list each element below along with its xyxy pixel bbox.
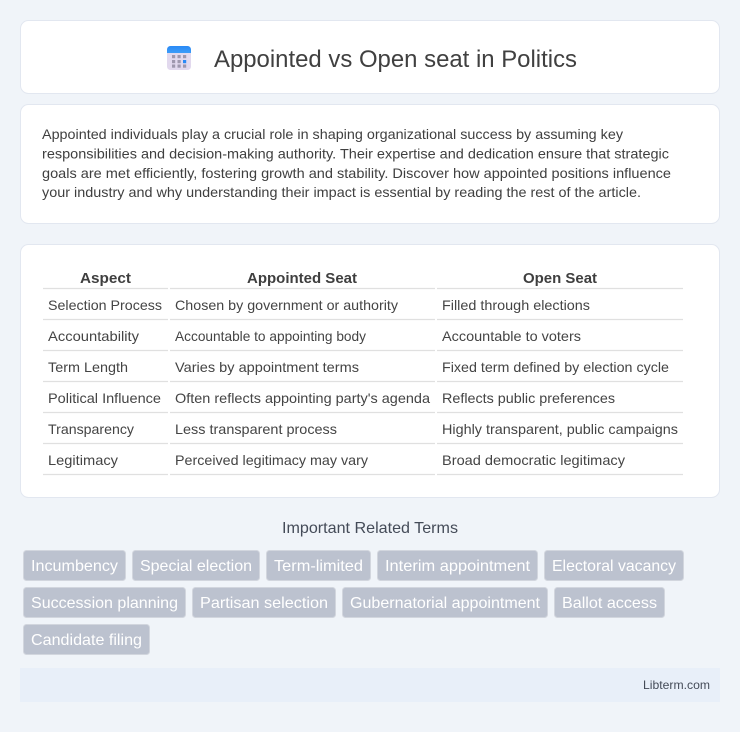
chip: term-limited: Term-limited xyxy=(274,558,363,575)
chip: special election xyxy=(132,550,260,580)
chip: partisan selection xyxy=(192,588,336,618)
chip: candidate filing: Candidate filing xyxy=(31,632,142,649)
related term chips xyxy=(24,550,684,654)
row: political influence: Often reflects appointing party's agenda xyxy=(175,390,430,406)
panel: comparison table xyxy=(20,244,720,498)
row: accountability: Accountable to appointing body xyxy=(175,328,366,344)
row: political influence: Reflects public preferences xyxy=(442,390,615,406)
chip: candidate filing xyxy=(24,624,150,654)
table header: Appointed Seat xyxy=(247,271,357,287)
row: accountability: Accountable to voters xyxy=(442,328,581,344)
chip: gubernatorial appointment: Gubernatorial appointment xyxy=(350,595,541,612)
chip: incumbency: Incumbency xyxy=(31,558,118,575)
chip: incumbency xyxy=(24,550,126,580)
row: legitimacy xyxy=(48,452,625,468)
row: legitimacy: Perceived legitimacy may vary xyxy=(175,452,368,468)
row: term length: Term Length xyxy=(48,359,128,375)
row: selection process: Selection Process xyxy=(48,297,162,313)
chip: gubernatorial appointment xyxy=(342,588,548,618)
row: selection process: Filled through elections xyxy=(442,297,590,313)
chip: interim appointment: Interim appointment xyxy=(385,558,531,575)
text block: introduction xyxy=(42,126,671,200)
row: political influence xyxy=(48,390,615,406)
row: accountability: Accountability xyxy=(48,328,139,344)
row: term length: Varies by appointment terms xyxy=(175,359,359,375)
table header: Aspect xyxy=(80,271,131,287)
heading: important related terms: Important Related Terms xyxy=(282,520,458,537)
row: transparency: Highly transparent, public campaigns xyxy=(442,421,678,437)
title: Appointed vs Open seat in Politics xyxy=(214,46,577,73)
icon: calendar xyxy=(167,46,191,70)
row: legitimacy: Legitimacy xyxy=(48,452,118,468)
chip: ballot access: Ballot access xyxy=(562,595,657,612)
row: political influence: Political Influence xyxy=(48,390,161,406)
row: transparency: Less transparent process xyxy=(175,421,337,437)
row: transparency xyxy=(48,421,678,437)
row: selection process xyxy=(48,297,590,313)
chip: succession planning xyxy=(24,588,186,618)
chip: term-limited xyxy=(266,550,370,580)
footer xyxy=(20,668,720,702)
chip: electoral vacancy: Electoral vacancy xyxy=(552,558,676,575)
panel: introduction xyxy=(20,104,720,224)
row: term length xyxy=(48,359,669,375)
table header xyxy=(80,271,597,287)
row: term length: Fixed term defined by election cycle xyxy=(442,359,669,375)
chip: interim appointment xyxy=(378,550,538,580)
text block: introduction: responsibilities and decision-making authority. Their expertise and dedication ensure that strategic xyxy=(42,146,669,162)
text block: introduction: your industry and why understanding their impact is essential by reading the rest of the article. xyxy=(42,184,641,200)
row: transparency: Transparency xyxy=(48,421,134,437)
chip: succession planning: Succession planning xyxy=(31,595,178,612)
chip: partisan selection: Partisan selection xyxy=(200,595,328,612)
chip: electoral vacancy xyxy=(544,550,684,580)
text block: introduction: Appointed individuals play a crucial role in shaping organizational success by assuming key xyxy=(42,126,623,142)
chip: special election: Special election xyxy=(140,558,252,575)
header panel xyxy=(20,20,720,94)
footer credit: Libterm.com xyxy=(643,678,710,692)
text block: introduction: goals are met efficiently, fostering growth and stability. Discover how appointed positions influence xyxy=(42,165,671,181)
table header: Open Seat xyxy=(523,271,597,287)
chip: ballot access xyxy=(554,588,664,618)
row: selection process: Chosen by government or authority xyxy=(175,297,398,313)
row: legitimacy: Broad democratic legitimacy xyxy=(442,452,625,468)
row: accountability xyxy=(48,328,581,344)
